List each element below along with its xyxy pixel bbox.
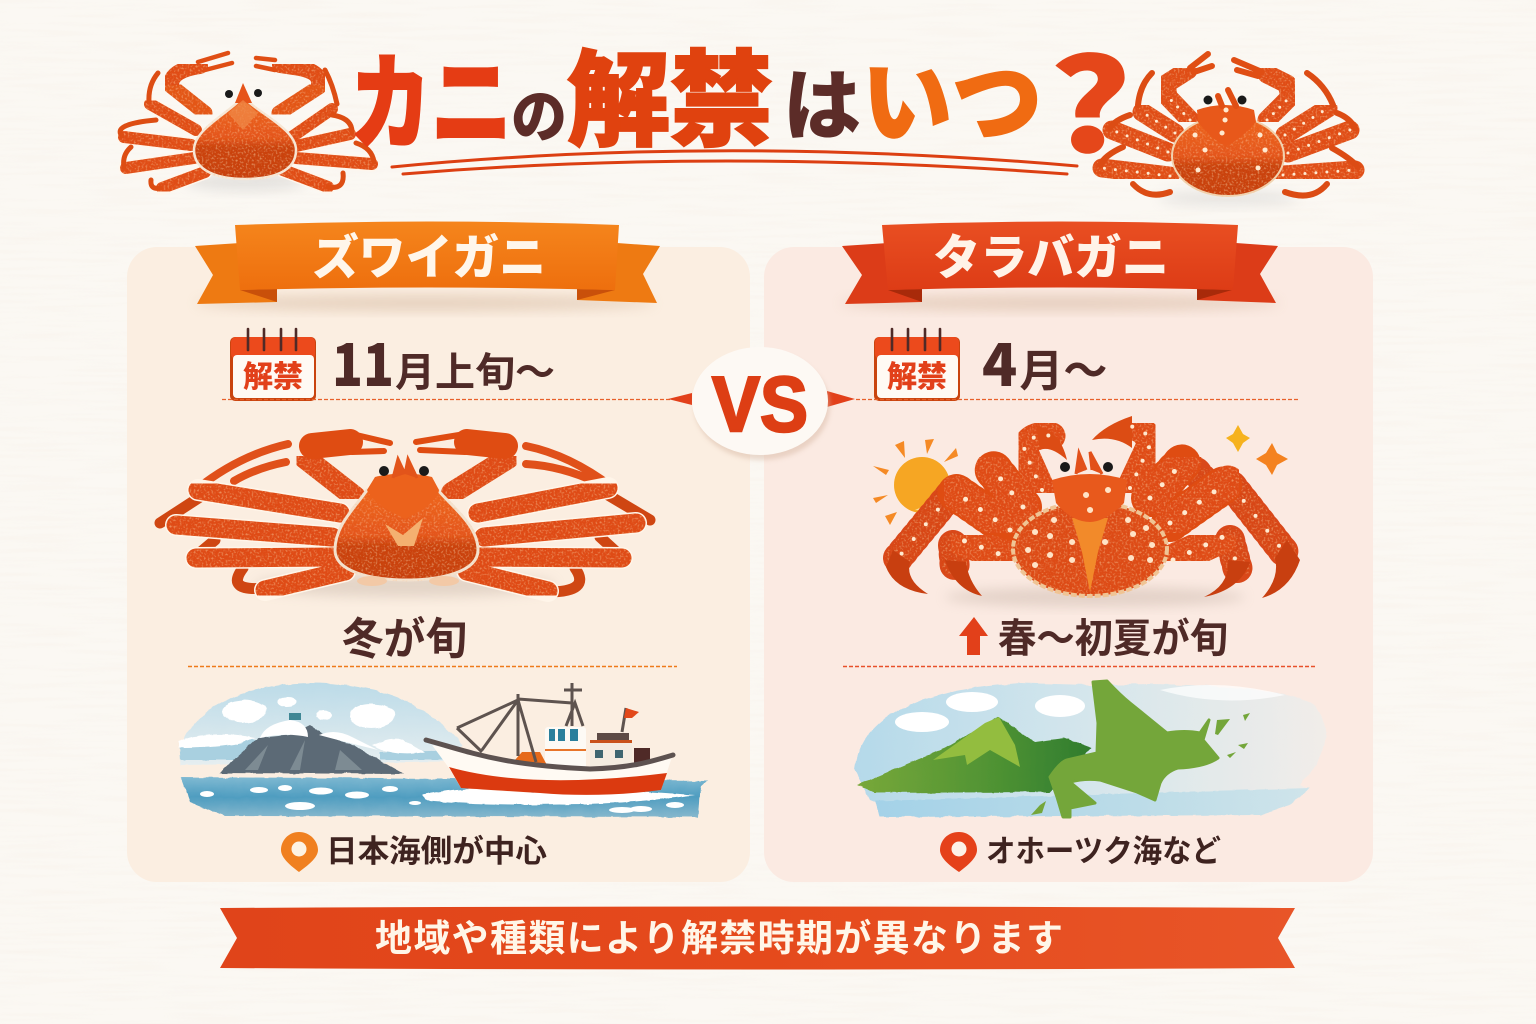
calendar label: 解禁 xyxy=(243,352,303,396)
title: いつ: いつ xyxy=(862,29,1042,162)
icon: sparkles xyxy=(1226,425,1288,475)
bottom banner xyxy=(220,906,1295,970)
title: question mark: ? xyxy=(1048,4,1132,189)
title: の: の xyxy=(511,70,567,154)
crab: top right king crab xyxy=(1100,54,1358,206)
icon: up arrow xyxy=(959,617,988,655)
title: 解禁: 解禁 xyxy=(567,16,773,167)
panel: ズワイガニ xyxy=(127,247,750,882)
location text: オホーツク海など xyxy=(986,826,1221,871)
icon: pin xyxy=(940,832,977,872)
ribbon: タラバガニ xyxy=(840,218,1280,311)
dashed divider right top xyxy=(856,398,1298,400)
sea xyxy=(181,777,708,817)
sea xyxy=(875,788,1310,817)
caption: 冬が旬: 冬が旬 xyxy=(342,603,467,667)
crab: top left snow crab xyxy=(120,53,374,191)
ribbon: ズワイガニ xyxy=(195,218,660,311)
icon: sun xyxy=(873,439,958,525)
island xyxy=(220,725,404,774)
scene: Sea of Japan with island and boat xyxy=(178,683,708,817)
boat xyxy=(426,683,673,795)
sky and clouds xyxy=(178,683,462,765)
location: Sea of Japan side xyxy=(281,826,547,872)
title: は: は xyxy=(783,44,861,156)
icon: calendar right xyxy=(874,329,960,401)
location: Okhotsk Sea xyxy=(940,826,1221,872)
Hokkaido map xyxy=(1050,681,1218,817)
crab: king crab illustration xyxy=(886,416,1300,607)
scene: Hokkaido map and green mountain xyxy=(855,681,1326,817)
sky xyxy=(855,683,1326,812)
date: 11月上旬〜: 11月上旬〜 xyxy=(332,319,555,403)
mountain xyxy=(857,717,1092,793)
ribbon label: タラバガニ xyxy=(933,218,1169,288)
banner text: 地域や種類により解禁時期が異なります xyxy=(375,908,1063,962)
VS text: VS xyxy=(712,360,808,448)
dashed divider left bottom xyxy=(188,666,677,668)
date: 4月〜: 4月〜 xyxy=(982,319,1107,403)
calendar label: 解禁 xyxy=(887,352,947,396)
foam xyxy=(422,788,695,804)
title xyxy=(350,4,1132,189)
title: カニ: カニ xyxy=(350,19,512,170)
panel: タラバガニ xyxy=(764,247,1373,882)
crab: snow crab illustration xyxy=(160,434,650,597)
ribbon label: ズワイガニ xyxy=(312,218,546,288)
caption: 春〜初夏が旬: 春〜初夏が旬 xyxy=(998,606,1228,664)
dashed divider left top xyxy=(222,398,672,400)
icon: pin xyxy=(281,832,318,872)
location text: 日本海側が中心 xyxy=(326,826,547,871)
icon: calendar left xyxy=(230,329,316,401)
VS badge xyxy=(668,347,855,460)
dashed divider right bottom xyxy=(843,666,1317,668)
title underline xyxy=(392,151,1077,174)
